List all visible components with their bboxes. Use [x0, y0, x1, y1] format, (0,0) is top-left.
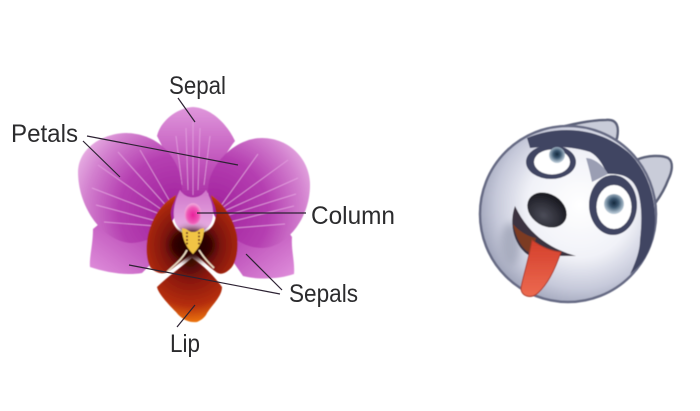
yellow throat — [182, 228, 204, 254]
mouth — [512, 206, 576, 256]
tongue — [521, 240, 561, 296]
column — [184, 203, 202, 225]
dark throat — [170, 229, 214, 261]
lip — [157, 258, 222, 322]
label: Sepals: Sepals — [289, 280, 358, 308]
left lateral lobe — [147, 195, 193, 273]
lower right sepal — [218, 220, 294, 278]
lip pale streaks — [167, 250, 214, 272]
top ear — [530, 120, 618, 150]
forehead grey patch — [586, 158, 608, 182]
lower left sepal — [90, 215, 170, 274]
upper sepal — [157, 107, 235, 212]
lower eye — [589, 175, 637, 235]
nose — [521, 185, 573, 235]
right ear — [636, 156, 672, 202]
cheek shadow — [500, 223, 520, 267]
right petal — [208, 138, 310, 248]
husky icon — [480, 120, 672, 302]
upper eye — [526, 145, 576, 179]
label: Column: Column — [311, 202, 395, 230]
head — [480, 126, 656, 302]
leader lines — [83, 98, 306, 327]
label: Lip: Lip — [170, 330, 200, 358]
column surround — [174, 190, 213, 233]
label: Sepal: Sepal — [169, 72, 226, 100]
dark fur band — [527, 130, 655, 274]
label: Petals: Petals — [11, 120, 78, 148]
left petal — [78, 133, 182, 243]
right lateral lobe — [193, 195, 238, 274]
orchid illustration — [78, 107, 310, 322]
